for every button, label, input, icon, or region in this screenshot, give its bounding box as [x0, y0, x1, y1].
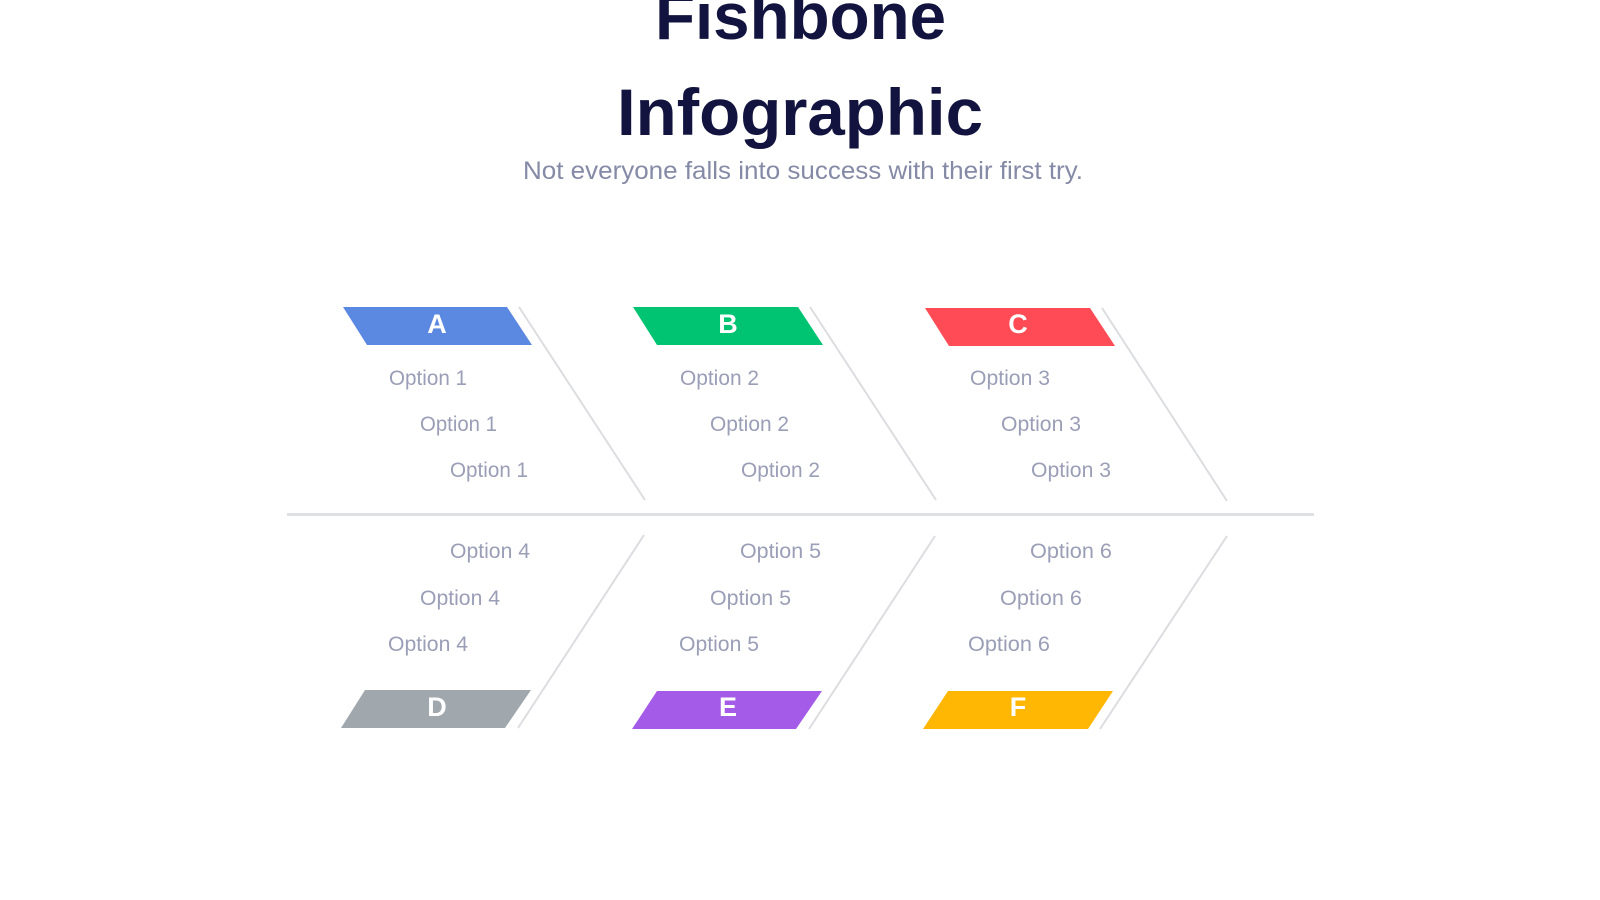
bone C — [1102, 308, 1227, 501]
bone A — [519, 307, 645, 500]
label D: D — [427, 692, 447, 722]
label B: B — [718, 309, 738, 339]
options C: Option 3 — [1001, 413, 1081, 436]
panel: A — [343, 307, 645, 500]
options D: Option 4 — [388, 633, 468, 656]
title — [617, 0, 983, 149]
label D — [341, 690, 531, 728]
options D: Option 4 — [450, 540, 530, 563]
options A — [389, 367, 528, 482]
bone D — [518, 535, 644, 728]
options A: Option 1 — [420, 413, 497, 436]
title: Infographic — [617, 75, 983, 149]
label F: F — [1010, 692, 1026, 722]
label B — [633, 307, 823, 345]
label A — [343, 307, 532, 345]
options E: Option 5 — [679, 633, 759, 656]
options E: Option 5 — [740, 540, 821, 563]
options F: Option 6 — [968, 633, 1050, 656]
panel: F — [923, 536, 1227, 729]
label A: A — [427, 309, 447, 339]
options C: Option 3 — [1031, 459, 1111, 482]
central spine — [287, 513, 1314, 516]
options D — [388, 540, 530, 656]
options C: Option 3 — [970, 367, 1050, 390]
options B: Option 2 — [680, 367, 759, 390]
options A: Option 1 — [389, 367, 467, 390]
options B: Option 2 — [710, 413, 789, 436]
bone F — [1100, 536, 1227, 729]
bone B — [810, 307, 936, 500]
options E: Option 5 — [710, 587, 791, 610]
options F — [968, 540, 1112, 656]
options E — [679, 540, 821, 656]
options C — [970, 367, 1111, 482]
bone E — [809, 536, 935, 729]
label C: C — [1008, 309, 1028, 339]
panel: C — [925, 308, 1227, 501]
options B — [680, 367, 820, 482]
panel: D — [341, 535, 644, 728]
options D: Option 4 — [420, 587, 500, 610]
options F: Option 6 — [1030, 540, 1112, 563]
options A: Option 1 — [450, 459, 528, 482]
label F — [923, 691, 1113, 729]
options B: Option 2 — [741, 459, 820, 482]
panel: B — [633, 307, 936, 500]
label C — [925, 308, 1115, 346]
subtitle: Not everyone falls into success with their first try. — [523, 157, 1083, 185]
panel: E — [632, 536, 935, 729]
label E — [632, 691, 822, 729]
options F: Option 6 — [1000, 587, 1082, 610]
label E: E — [719, 692, 737, 722]
